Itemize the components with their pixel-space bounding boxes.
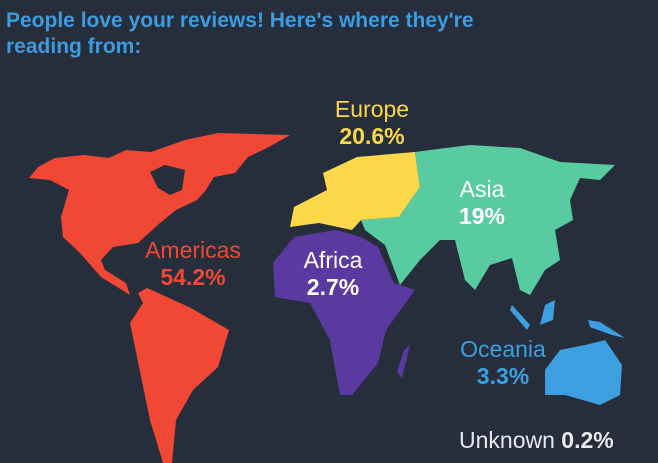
label: Americas [145,237,241,290]
label: Americas: 54.2% [160,264,226,290]
label: Europe [335,96,409,149]
label: Oceania [460,336,546,389]
label: Europe: 20.6% [339,123,405,149]
label: Asia: Asia [460,176,504,202]
label: Oceania: Oceania [460,336,546,362]
label: Americas: Americas [145,237,241,263]
title: People love your reviews! Here's where they're [6,9,474,32]
title [6,9,474,58]
continent: Oceania [510,300,625,405]
continent: Africa [273,230,415,395]
continent: Asia [361,145,615,295]
continent: Americas [29,133,290,463]
title: reading from: [6,35,141,58]
label: Africa: 2.7% [307,274,359,300]
label: Africa [304,247,362,300]
continent: Europe [290,152,420,230]
label: Unknown: Unknown 0.2% [459,427,614,453]
Hudson bay [150,165,185,195]
label: Africa: Africa [304,247,362,273]
label: Europe: Europe [335,96,409,122]
label: Oceania: 3.3% [477,363,529,389]
label: Asia [459,176,505,229]
label: Asia: 19% [459,203,505,229]
